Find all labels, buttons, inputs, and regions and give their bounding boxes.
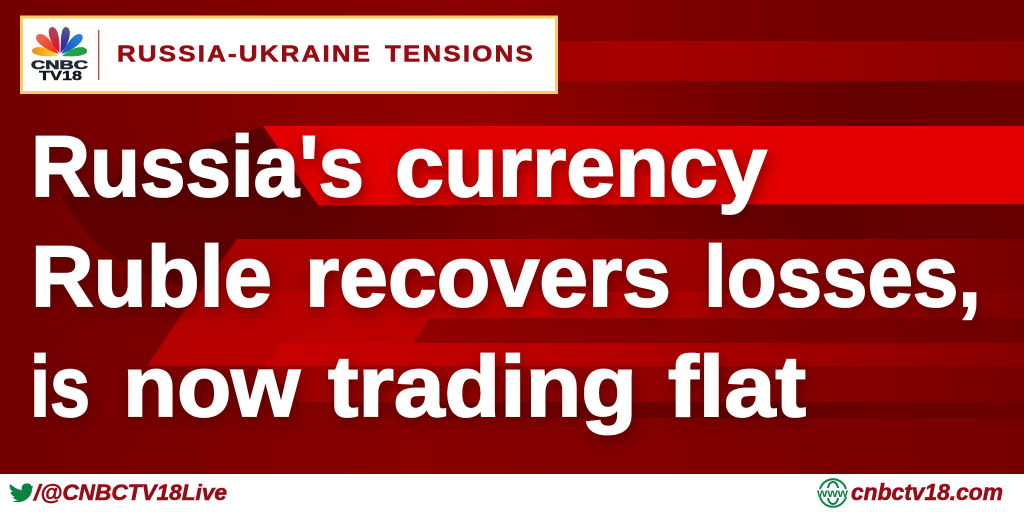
headline bbox=[30, 119, 981, 435]
headline: currency bbox=[395, 119, 767, 215]
logo wordmark: CNBC bbox=[31, 58, 89, 72]
website: cnbctv18.com bbox=[851, 479, 1003, 505]
icon: www globe: www bbox=[816, 486, 849, 500]
headline: recovers bbox=[305, 229, 671, 325]
headline: is bbox=[30, 339, 90, 435]
bright red band bbox=[263, 126, 1024, 205]
header tag bbox=[22, 17, 556, 92]
twitter handle: /@CNBCTV18Live bbox=[33, 480, 227, 505]
headline: losses, bbox=[704, 229, 981, 325]
headline: Ruble bbox=[31, 229, 272, 325]
header title: RUSSIA-UKRAINE TENSIONS bbox=[117, 40, 535, 66]
footer bar bbox=[0, 474, 1024, 512]
headline: flat bbox=[668, 339, 806, 435]
headline: now bbox=[123, 339, 301, 435]
icon: peacock feathers bbox=[32, 27, 87, 56]
logo: CNBC TV18 bbox=[31, 27, 89, 83]
logo wordmark TV18: TV18 bbox=[39, 68, 82, 83]
icon: twitter bird bbox=[10, 483, 33, 502]
headline: Russia's bbox=[31, 119, 364, 215]
icon: www globe bbox=[816, 479, 849, 507]
headline: trading bbox=[328, 339, 637, 435]
